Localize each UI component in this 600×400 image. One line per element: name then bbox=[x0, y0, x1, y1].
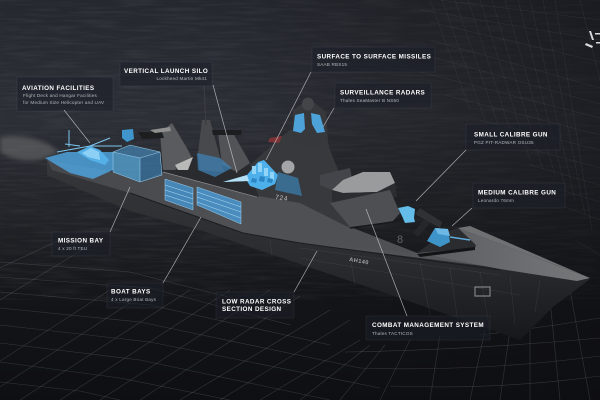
callout: surface to surface missiles: SURFACE TO SURFACE MISSILES bbox=[317, 54, 431, 60]
forward gun mount deck bbox=[417, 228, 476, 253]
aft block bbox=[160, 123, 192, 170]
helicopter bbox=[57, 130, 122, 165]
callout: vertical launch silo: Lockheed Martin Mk41 bbox=[157, 76, 207, 81]
forward superstructure bbox=[320, 168, 352, 190]
callout: medium calibre gun: MEDIUM CALIBRE GUN bbox=[478, 190, 556, 196]
callout: boat bays bbox=[107, 217, 201, 308]
main tower bbox=[250, 130, 350, 228]
callout: small calibre gun: SMALL CALIBRE GUN bbox=[474, 132, 548, 138]
callout: low radar cross section design: SECTION DESIGN bbox=[222, 306, 282, 313]
callout: aviation facilities: AVIATION FACILITIES bbox=[22, 85, 94, 92]
callout: surveillance radars: Thales SeaMaster B NS50 bbox=[340, 98, 399, 103]
callout: low radar cross section design bbox=[216, 251, 317, 318]
callout: combat management system: Thales TACTICOS bbox=[372, 331, 413, 336]
boat bay slats bbox=[165, 185, 241, 218]
callout: low radar cross section design: LOW RADAR CROSS bbox=[222, 298, 291, 306]
boat bay 2 bbox=[197, 187, 241, 224]
medium calibre gun bbox=[427, 228, 470, 247]
dark midship deck bbox=[163, 155, 258, 197]
callout: combat management system: COMBAT MANAGEMENT SYSTEM bbox=[372, 322, 484, 329]
ship bbox=[45, 85, 590, 340]
hull mid line shadow bbox=[130, 193, 500, 270]
mast bbox=[204, 85, 206, 125]
callout: medium calibre gun: Leonardo 76mm bbox=[478, 198, 514, 203]
red detail bbox=[268, 136, 282, 143]
hull lettering: pennant: 724 bbox=[275, 194, 289, 203]
callout: aviation facilities: Flight Deck and Hangar Facilities bbox=[23, 93, 98, 98]
upper hull plating bbox=[47, 160, 500, 268]
small calibre gun bbox=[398, 206, 415, 223]
uav bbox=[122, 129, 134, 142]
midship deck bbox=[200, 180, 417, 253]
breakwater bbox=[413, 215, 433, 237]
callout: surveillance radars: SURVEILLANCE RADARS bbox=[340, 90, 425, 96]
callout: aviation facilities: for Medium Size Helicopter and UAV bbox=[23, 100, 105, 105]
corner logo bbox=[585, 31, 600, 48]
vls bay highlight bbox=[197, 153, 232, 177]
boat bay 1 bbox=[165, 179, 193, 210]
third block bbox=[218, 133, 250, 172]
callout: boat bays: BOAT BAYS bbox=[111, 288, 151, 296]
radar panel starboard bbox=[311, 113, 325, 133]
vls missile cluster bbox=[223, 160, 278, 190]
callout: aviation facilities bbox=[17, 77, 113, 143]
callout: combat management system bbox=[366, 209, 490, 340]
callout: boat bays: 4 x Large Boat Bays bbox=[111, 297, 157, 302]
hangar box highlight bbox=[113, 145, 162, 182]
foredeck bbox=[417, 228, 590, 281]
callout: surveillance radars bbox=[323, 83, 431, 127]
callout: small calibre gun: PGZ PIT-RADWAR OSU35 bbox=[474, 140, 534, 145]
white panel bbox=[175, 157, 193, 170]
distant fine grid bbox=[420, 0, 600, 255]
callout: mission bay: MISSION BAY bbox=[58, 238, 104, 244]
lower hull bbox=[47, 160, 590, 340]
callout: small calibre gun bbox=[416, 124, 560, 201]
callout: surface to surface missiles: SAAB RBS15 bbox=[317, 62, 347, 67]
deck edge highlight bbox=[163, 172, 257, 197]
hull lettering: name: AH140 bbox=[349, 257, 369, 266]
callout: surface to surface missiles bbox=[266, 47, 435, 160]
hull wireframe bbox=[270, 240, 540, 332]
callout: mission bay: 4 x 20 ft TEU bbox=[58, 246, 87, 251]
callout: medium calibre gun bbox=[452, 183, 565, 226]
perspective wireframe grid bbox=[0, 235, 600, 400]
tower deck highlight bbox=[275, 172, 302, 196]
wake behind the ship bbox=[0, 136, 58, 161]
bow marking bbox=[475, 287, 490, 296]
deck boxes bbox=[138, 130, 242, 139]
callout: vertical launch silo: VERTICAL LAUNCH SILO bbox=[124, 68, 208, 75]
second block bbox=[198, 120, 224, 172]
deck number: 8 bbox=[397, 234, 403, 246]
callout: vertical launch silo bbox=[120, 62, 237, 173]
radar panel port bbox=[293, 113, 305, 133]
flight deck highlight bbox=[45, 152, 113, 179]
dome radome bbox=[282, 160, 294, 174]
callout: mission bay bbox=[52, 187, 130, 256]
